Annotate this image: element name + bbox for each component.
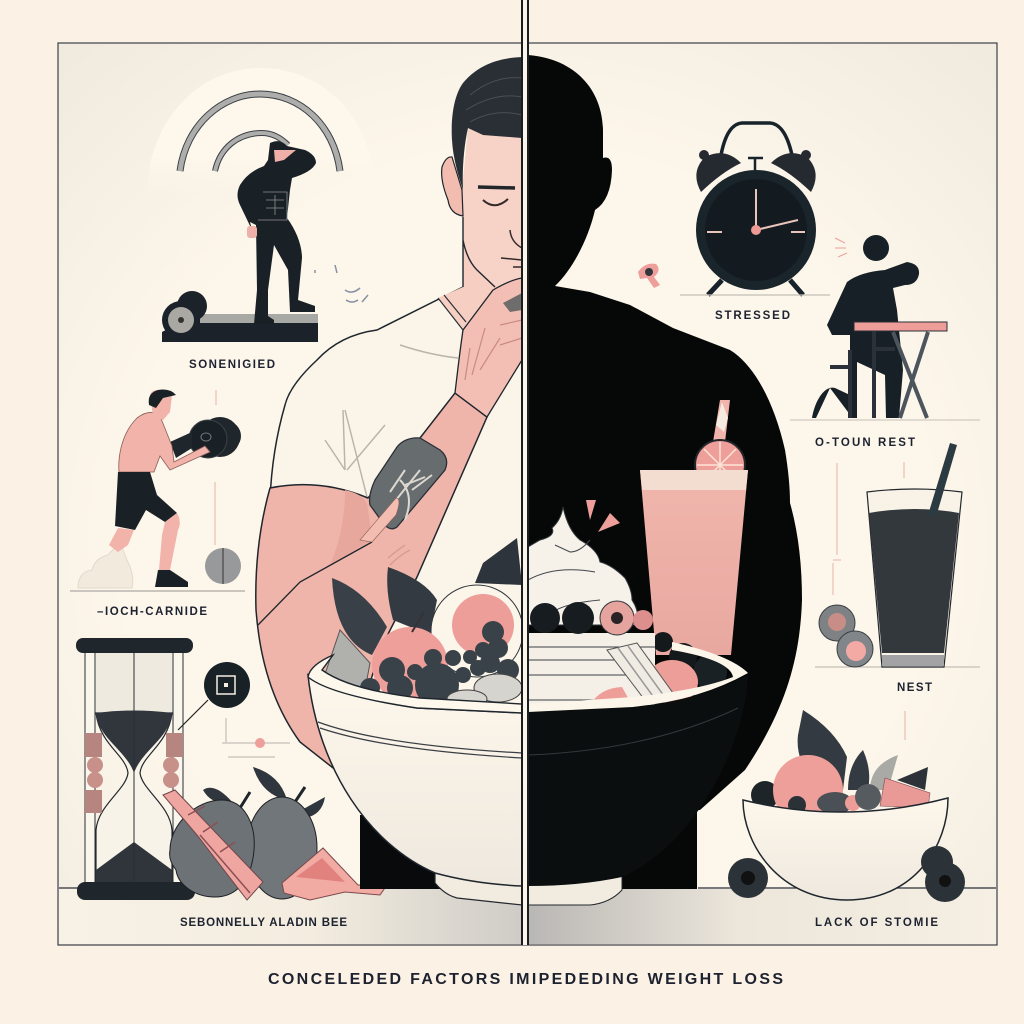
berries on floor [728, 858, 768, 898]
liquid [869, 509, 959, 653]
bowl body right [528, 675, 748, 886]
central divider [521, 0, 529, 945]
food right in bowl [528, 601, 727, 705]
straw [928, 443, 957, 517]
foot right [528, 870, 622, 905]
apple [372, 627, 448, 703]
tall milkshake [640, 400, 748, 655]
label: rest: O-TOUN REST [815, 437, 915, 449]
chair [830, 331, 895, 418]
pink slices [880, 778, 930, 808]
bowl [743, 798, 948, 900]
glass curve [96, 713, 172, 882]
dust cloud [78, 542, 133, 588]
table legs [893, 332, 928, 418]
front leg [159, 513, 180, 570]
beads [85, 733, 183, 813]
foot left [435, 870, 522, 905]
big bowl [308, 642, 748, 905]
head [150, 390, 172, 420]
torso and arm [119, 412, 210, 472]
head [462, 125, 522, 287]
faint arch [147, 68, 375, 195]
caps [76, 638, 193, 653]
jaw line [463, 217, 495, 287]
label: sonenigied: SONENIGIED [189, 359, 275, 371]
alarm clock [680, 123, 830, 295]
shoe [155, 570, 188, 587]
bottom sand [96, 842, 172, 884]
base [882, 655, 944, 666]
face and hand [274, 150, 296, 162]
glass rim [640, 470, 748, 490]
pink sparks [586, 500, 620, 532]
rim left [308, 655, 522, 713]
hair [149, 390, 176, 408]
blackberries [653, 632, 673, 652]
thumb [360, 498, 399, 542]
treadmill [162, 314, 318, 342]
feet [708, 280, 803, 295]
motion marks [315, 265, 368, 302]
neck [438, 217, 522, 330]
label: stressed: STRESSED [715, 310, 790, 322]
shirt wrinkle [325, 345, 458, 497]
left apple [170, 800, 254, 897]
stripe left [318, 722, 522, 758]
berries [530, 603, 560, 633]
hip hand [247, 226, 257, 238]
small bowl [728, 710, 965, 902]
stressed figure at desk [790, 235, 980, 420]
hair strands [466, 78, 522, 122]
label: aladin bee: SEBONNELLY ALADIN BEE [180, 917, 347, 929]
right apple [247, 797, 317, 899]
eyebrow [478, 187, 515, 188]
glass [96, 653, 172, 713]
lifter figure [70, 390, 245, 591]
grey disc [205, 548, 241, 584]
blackberry [751, 781, 779, 809]
floor [815, 666, 980, 668]
athlete [238, 141, 316, 324]
stripe right [528, 708, 738, 755]
posts [85, 652, 95, 884]
bells [696, 153, 816, 192]
glass [867, 489, 962, 667]
label: stomie: LACK OF STOMIE [815, 917, 938, 929]
ground [70, 590, 245, 592]
food left in bowl [323, 538, 523, 708]
body [696, 170, 816, 290]
under-bowl block left [360, 815, 522, 889]
axis [133, 653, 135, 885]
arm shading [330, 490, 372, 565]
straw [713, 400, 730, 442]
hourglass [76, 638, 290, 900]
hand crease [388, 545, 410, 565]
leaves [332, 578, 387, 655]
pills [819, 605, 855, 641]
treadmill figure [162, 141, 368, 342]
grapefruit [431, 585, 523, 677]
person: light half [256, 57, 522, 775]
shirt [270, 287, 522, 620]
leaves [203, 767, 325, 818]
top sand [96, 710, 172, 773]
pink slice [654, 660, 698, 703]
label: nest: NEST [897, 682, 932, 694]
nose and mouth [501, 230, 522, 267]
abdomen lines [258, 192, 287, 220]
slice [282, 848, 387, 900]
handle [721, 123, 792, 155]
rim right [528, 642, 748, 712]
tape ticks [188, 806, 250, 893]
table [854, 322, 947, 331]
floor left [59, 889, 522, 944]
label: carnide: –IOCH-CARNIDE [97, 606, 207, 618]
stems [240, 787, 305, 808]
dark drink [815, 443, 980, 740]
small marks [222, 718, 290, 757]
person: dark half [360, 55, 802, 889]
berries [360, 621, 519, 707]
small pink icon [638, 264, 660, 288]
leaves [798, 710, 847, 790]
apple [773, 755, 843, 825]
strain marks [835, 238, 847, 257]
cake layers [528, 633, 655, 705]
apples with tape [163, 767, 387, 900]
lemon slices [474, 674, 522, 702]
ear [442, 157, 463, 216]
floor line [59, 887, 996, 889]
head silhouette [528, 55, 802, 810]
dumbbell [170, 417, 241, 458]
floor right [528, 889, 996, 944]
closed eye [483, 199, 508, 205]
arc icon [180, 94, 340, 171]
hand [455, 278, 522, 417]
callout dot [204, 662, 250, 708]
chin object [503, 293, 522, 312]
tape [163, 790, 263, 900]
shorts [115, 472, 177, 530]
rolled item [607, 643, 673, 703]
collar [438, 295, 466, 330]
phone device [370, 438, 447, 529]
citrus slice [695, 440, 745, 490]
under-bowl block right [528, 800, 697, 889]
small pinks [845, 795, 861, 811]
body [812, 262, 919, 418]
finger lines [465, 320, 522, 380]
whipped cream [528, 507, 638, 625]
bowl body left [308, 675, 522, 886]
glass [640, 470, 748, 655]
title: CONCELEDED FACTORS IMIPEDEDING WEIGHT LOSS [268, 971, 783, 988]
rear leg [109, 528, 134, 552]
elbow crease [258, 542, 372, 625]
arm [256, 393, 487, 775]
hands [707, 189, 805, 232]
hair [452, 57, 522, 190]
